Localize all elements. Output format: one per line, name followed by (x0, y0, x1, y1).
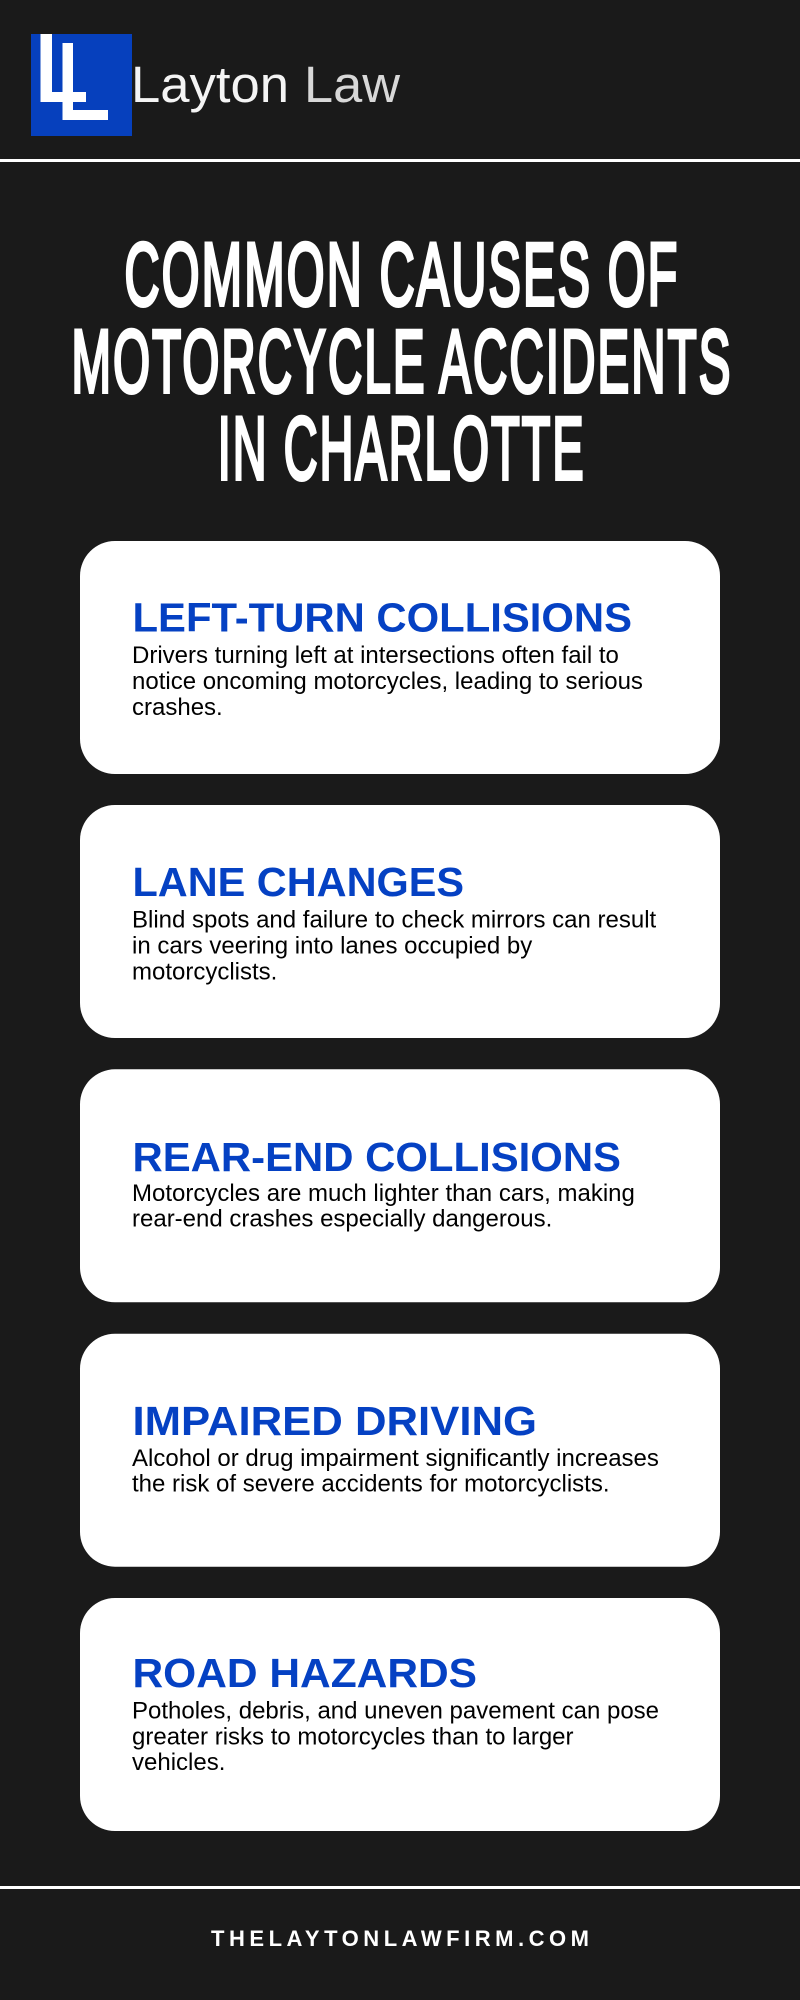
text: road hazards description: vehicles. (132, 1749, 225, 1776)
logo wordmark: Law (304, 56, 400, 113)
text: lane changes description: in cars veering into lanes occupied by (132, 932, 532, 959)
text: lane changes description: motorcyclists. (132, 958, 277, 985)
text: rear-end description: rear-end crashes especially dangerous. (132, 1206, 552, 1233)
heading: lane changes: LANE CHANGES (132, 859, 464, 905)
text: left-turn description: Drivers turning left at intersections often fail to (132, 642, 619, 669)
footer website: THELAYTONLAWFIRM.COM (211, 1926, 589, 1951)
icon: LL logo mark (31, 34, 132, 136)
text: road hazards description: greater risks to motorcycles than to larger (132, 1723, 574, 1750)
title (72, 224, 732, 498)
heading: impaired driving: IMPAIRED DRIVING (132, 1398, 537, 1444)
heading: left-turn collisions: LEFT-TURN COLLISIONS (132, 595, 632, 641)
text: impaired driving description: the risk of severe accidents for motorcyclists. (132, 1471, 610, 1498)
logo wordmark: Layton (131, 56, 289, 113)
text: lane changes description: Blind spots and failure to check mirrors can result (132, 906, 657, 933)
panel: impaired driving (80, 1334, 720, 1567)
heading: road hazards: ROAD HAZARDS (132, 1650, 477, 1696)
panel: road hazards (80, 1598, 720, 1831)
text: rear-end description: Motorcycles are much lighter than cars, making (132, 1180, 635, 1207)
heading: rear-end collisions: REAR-END COLLISIONS (132, 1134, 621, 1180)
panel: lane changes (80, 805, 720, 1038)
panel: left-turn collisions (80, 541, 720, 774)
header logo (31, 34, 400, 136)
text: left-turn description: notice oncoming motorcycles, leading to serious (132, 668, 643, 695)
text: left-turn description: crashes. (132, 694, 223, 721)
logo wordmark (131, 56, 400, 113)
text: impaired driving description: Alcohol or drug impairment significantly increases (132, 1445, 659, 1472)
panel: rear-end collisions (80, 1069, 720, 1302)
text: road hazards description: Potholes, debris, and uneven pavement can pose (132, 1697, 659, 1724)
